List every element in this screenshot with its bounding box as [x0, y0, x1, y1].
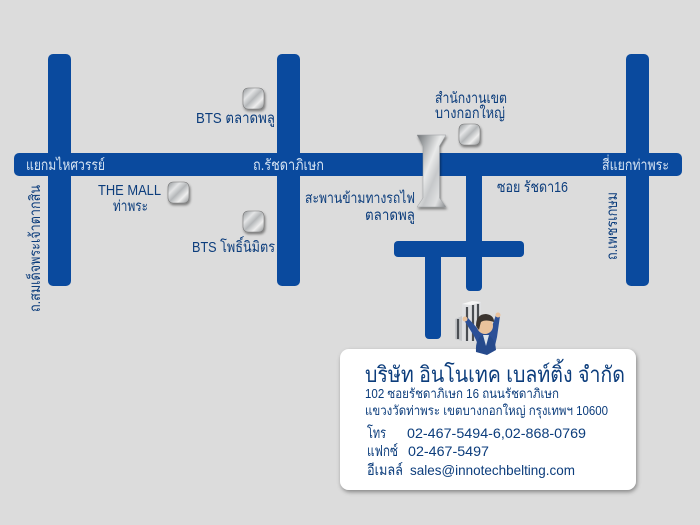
text: telephone: โทร — [367, 424, 386, 442]
text: fax: 02-467-5497 — [408, 443, 489, 459]
road: right vertical — [626, 54, 649, 286]
label: The Mall Tha Phra: ท่าพระ — [113, 198, 148, 215]
road label: Soi Ratchada 16: ซอย รัชดา16 — [497, 179, 568, 196]
road: main horizontal Ratchadaphisek — [14, 153, 682, 176]
text: address: แขวงวัดท่าพระ เขตบางกอกใหญ่ กรุงเทพฯ 10600 — [365, 403, 608, 419]
road: stub to company — [425, 250, 441, 339]
icon: railway bridge — [417, 135, 446, 207]
text: email: sales@innotechbelting.com — [410, 462, 575, 478]
label: Talat Phlu railway bridge: ตลาดพลู — [365, 207, 415, 224]
road: left vertical — [48, 54, 71, 286]
label: Bangkok Yai District Office: บางกอกใหญ่ — [435, 104, 505, 122]
road label: Tha Phra Intersection: สี่แยกท่าพระ — [602, 154, 669, 174]
label: BTS Talat Phlu: BTS ตลาดพลู — [196, 110, 275, 127]
text: email: อีเมลล์ — [367, 462, 403, 479]
road label: Intersection Mahaisawan: แยกมไหศวรรย์ — [26, 156, 105, 174]
icon: businessman and building — [455, 301, 500, 355]
text: fax — [367, 443, 489, 460]
road label: Somdet Phra Chao Taksin Road: ถ.สมเด็จพระเจ้าตากสิน — [25, 185, 44, 312]
label: Bangkok Yai District Office — [435, 90, 507, 122]
text: telephone: 02-467-5494-6,02-868-0769 — [407, 425, 586, 441]
icon: The Mall marker — [168, 182, 189, 203]
panel: company contact card — [340, 349, 636, 490]
heading: company name: บริษัท อินโนเทค เบลท์ติ้ง จำกัด — [365, 359, 625, 387]
text: fax: แฟกซ์ — [367, 443, 398, 460]
label: BTS Pho Nimit: BTS โพธิ์นิมิตร — [192, 236, 275, 256]
text: address: 102 ซอยรัชดาภิเษก 16 ถนนรัชดาภิเษก — [365, 386, 559, 401]
road label: Ratchadaphisek Road: ถ.รัชดาภิเษก — [253, 157, 324, 174]
label: Talat Phlu railway bridge: สะพานข้ามทางรถไฟ — [305, 189, 415, 207]
label: Talat Phlu railway bridge — [305, 189, 415, 224]
icon: District office marker — [459, 124, 480, 145]
label: The Mall Tha Phra: THE MALL — [98, 182, 161, 199]
road: centre vertical — [277, 54, 300, 286]
road: cross street — [394, 241, 524, 257]
label: The Mall Tha Phra — [98, 182, 161, 215]
icon: BTS Pho Nimit marker — [243, 211, 264, 232]
icon: BTS Talat Phlu marker — [243, 88, 264, 109]
text: address — [365, 386, 608, 419]
road: Soi Ratchada 16 — [466, 170, 482, 291]
label: Bangkok Yai District Office: สำนักงานเขต — [435, 90, 507, 107]
road label: Phetkasem Road: ถ.เพชรเกษม — [604, 192, 621, 260]
